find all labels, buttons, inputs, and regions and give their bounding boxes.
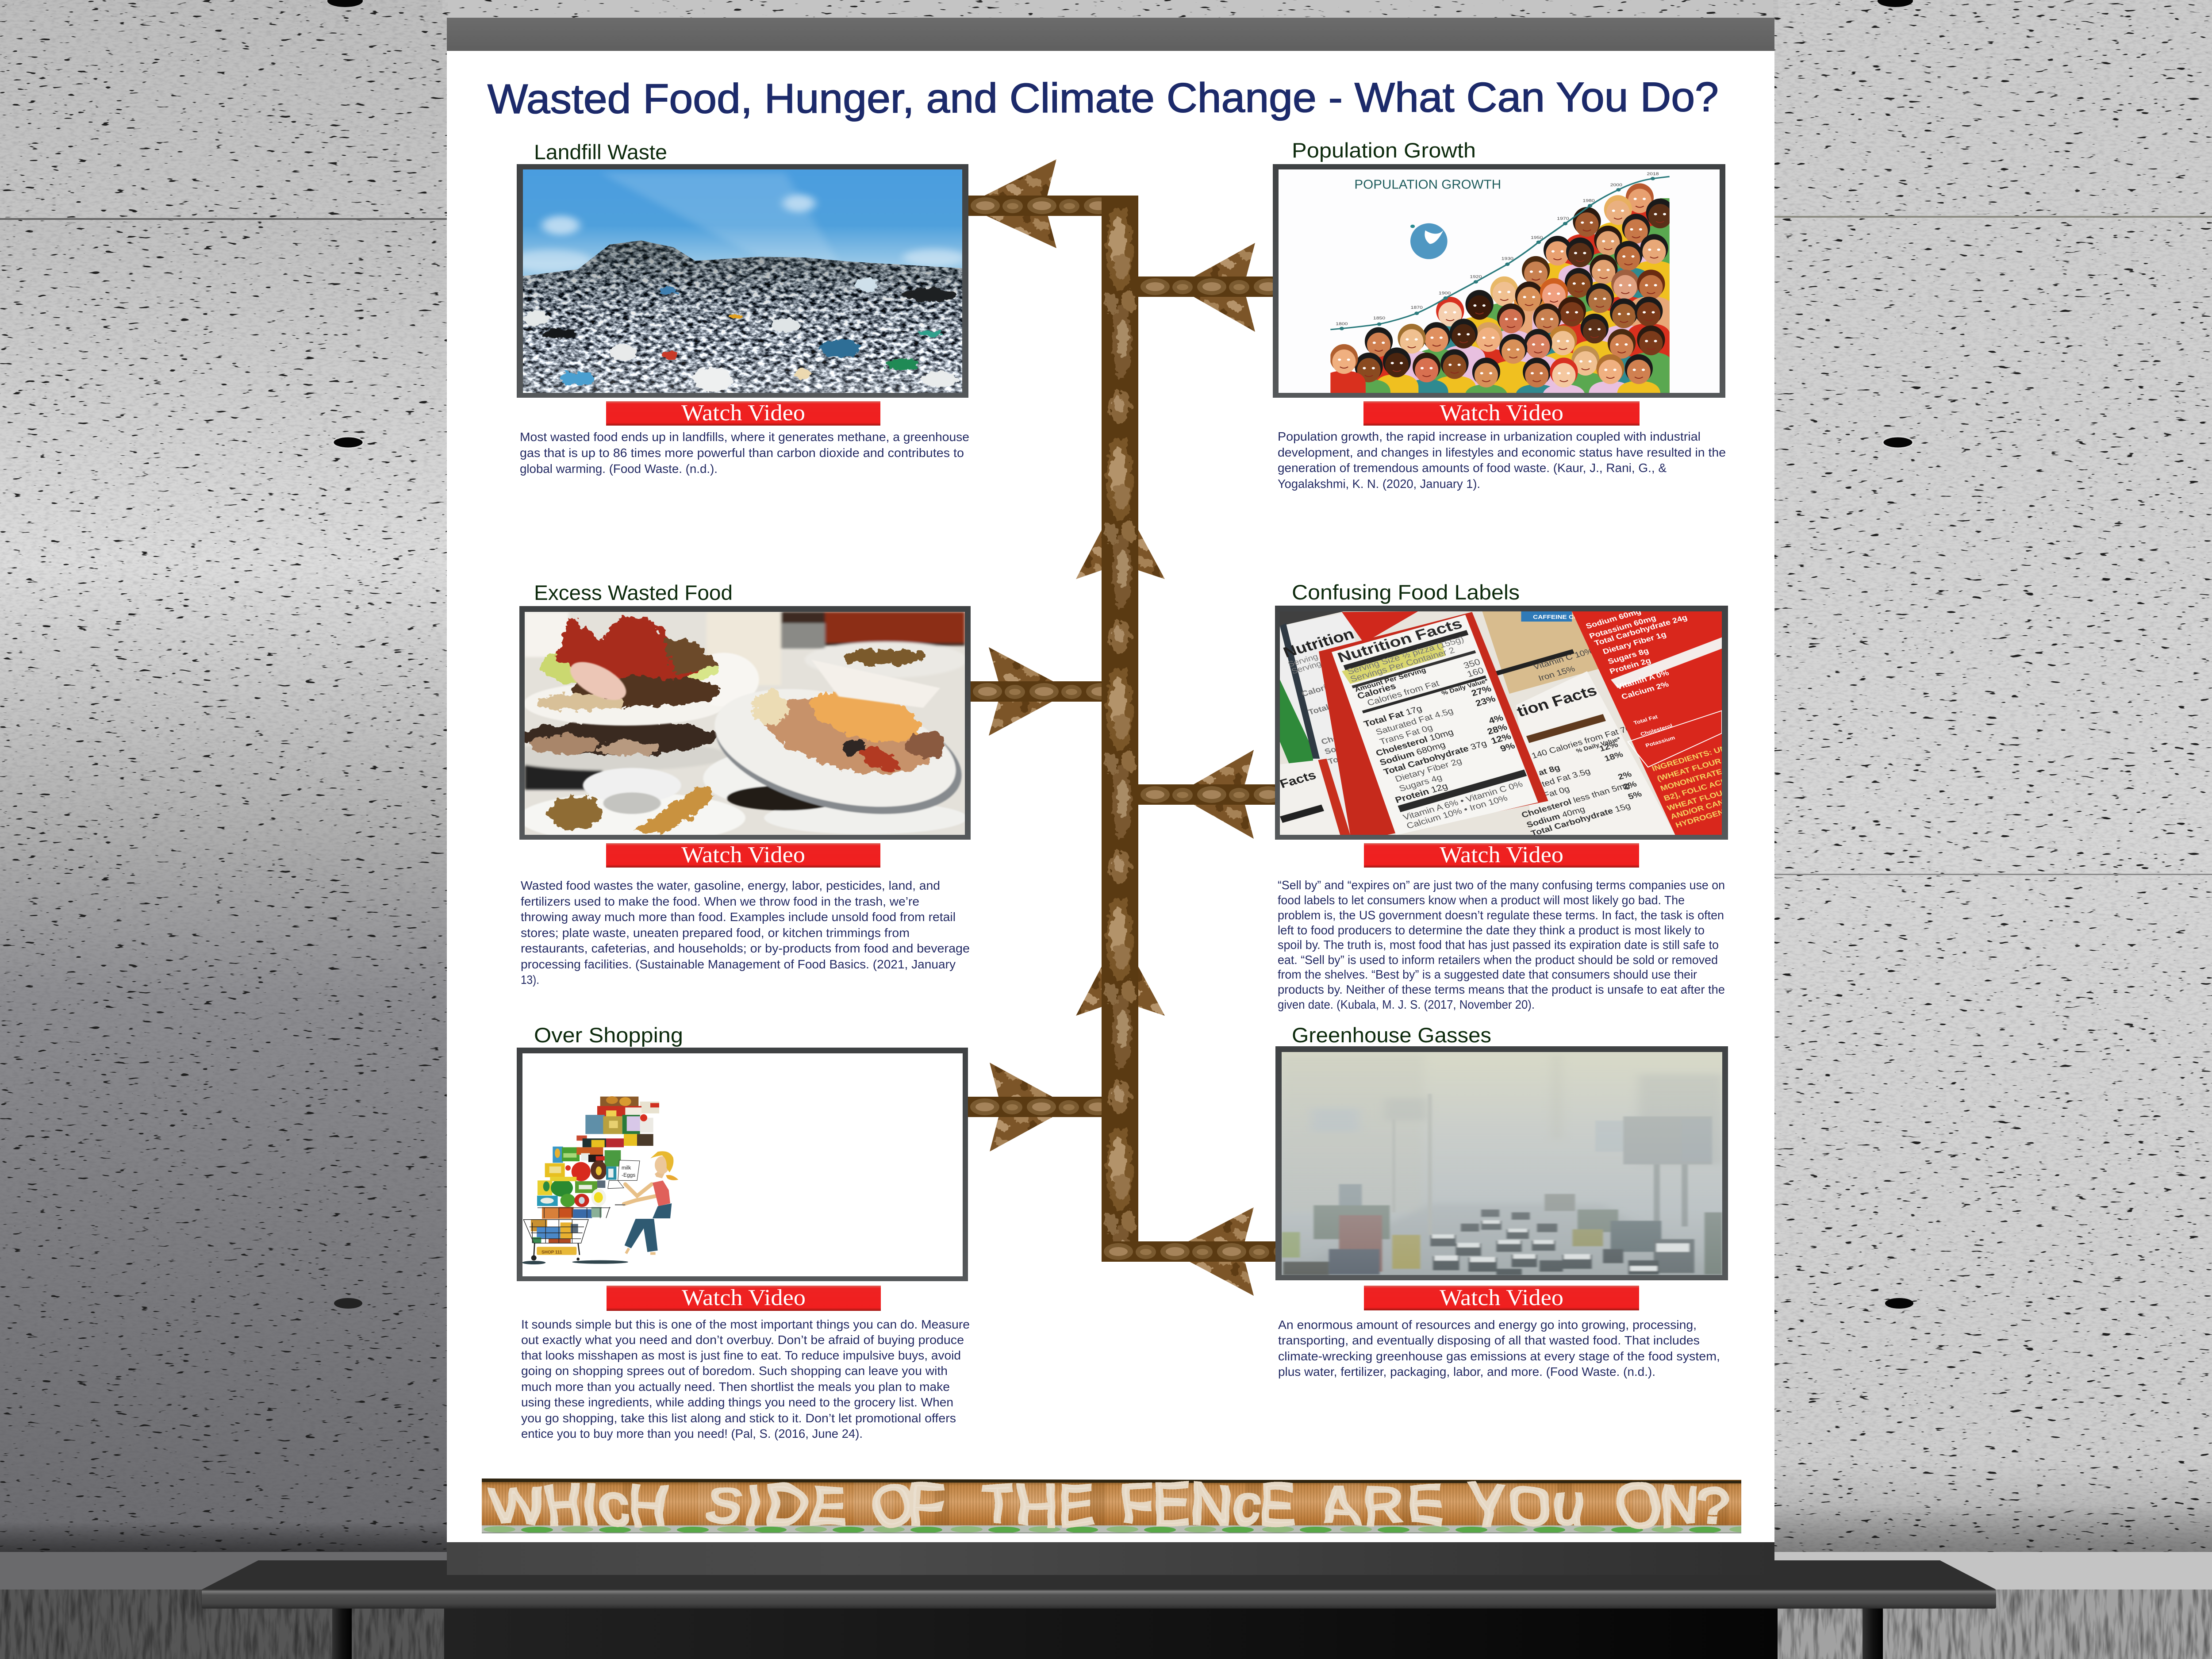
body text: restaurants, cafeterias, and households; or by-products from food and beverage [521, 941, 970, 955]
frame [517, 1048, 968, 1281]
body text: It sounds simple but this is one of the most important things you can do. Measure [521, 1317, 970, 1331]
photo: nutrition facts labels: Dietary Fiber 2g [1394, 757, 1463, 784]
chart: population growth illustration: 1900 [1439, 291, 1451, 296]
photo: nutrition facts labels: MONONITRATE [VITAM [1659, 758, 1754, 793]
slogan text: THE [980, 1475, 1094, 1536]
panel: over shopping [517, 1023, 970, 1440]
body text: given date. (Kubala, M. J. S. (2017, November 20). [1278, 998, 1535, 1011]
body text: Wasted food wastes the water, gasoline, energy, labor, pesticides, land, and [521, 879, 940, 892]
watch video button: Watch Video [1440, 400, 1563, 426]
photo: nutrition facts labels: Trans Fat 0g [1379, 723, 1434, 746]
photo: nutrition facts labels: Protein 2g [1608, 656, 1652, 676]
photo: nutrition facts labels: Cholesterol less than 5mg [1520, 780, 1631, 820]
photo: nutrition facts labels: Sodiu [1323, 741, 1351, 757]
slogan text: FENcE [1120, 1475, 1295, 1536]
photo: nutrition facts labels: Total F [1307, 701, 1338, 717]
photo: nutrition facts labels: % Daily Value* [1441, 678, 1489, 697]
photo: nutrition facts labels: Amount Per Serving [1354, 666, 1427, 694]
photo: nutrition facts labels: 9% [1499, 741, 1517, 754]
photo: nutrition facts labels: Saturated Fat 4.5g [1375, 707, 1455, 737]
photo: nutrition facts labels: 28% [1486, 722, 1509, 737]
body text: generation of tremendous amounts of food waste. (Kaur, J., Rani, G., & [1278, 461, 1667, 475]
body text: gas that is up to 86 times more powerful than carbon dioxide and contributes to [520, 446, 964, 460]
watch video button: Watch Video [681, 400, 805, 426]
photo: nutrition facts labels: Sodium 680mg [1379, 741, 1447, 768]
chart: population growth illustration: 1970 [1557, 216, 1569, 221]
wall bolt holes [327, 0, 1913, 1309]
watch video button [1364, 842, 1639, 868]
title: Wasted Food, Hunger, and Climate Change - What Can You Do? [488, 73, 1719, 122]
chart: population growth illustration: 1930 [1502, 257, 1513, 261]
body text: An enormous amount of resources and energy go into growing, processing, [1278, 1318, 1697, 1332]
heading: Population Growth [1292, 138, 1476, 162]
body text: Yogalakshmi, K. N. (2020, January 1). [1278, 477, 1480, 491]
body text: entice you to buy more than you need! (Pal, S. (2016, June 24). [521, 1427, 863, 1440]
body text [521, 879, 970, 987]
body text: spoil by. The truth is, most food that has just passed its expiration date is still safe to [1278, 938, 1719, 952]
arrow: main trunk [1102, 196, 1138, 1262]
body text: development, and changes in lifestyles and economic status have resulted in the [1278, 445, 1726, 459]
photo: nutrition facts labels: HYDROGENATE [1674, 803, 1741, 829]
photo: nutrition facts labels: Fat 0g [1542, 784, 1571, 800]
body text: fertilizers used to make the food. When we throw food in the trash, we’re [521, 895, 919, 908]
chart: population growth illustration: 2000 [1610, 183, 1622, 188]
watch video button [606, 842, 880, 868]
photo: nutrition facts labels: Calcium 2% [1620, 680, 1670, 701]
panel: landfill waste [510, 140, 969, 476]
chart: population growth illustration: POPULATION GROWTH [1354, 177, 1501, 192]
photo: nutrition facts labels: Vitamin A 6% • Vitamin C 0% [1402, 780, 1524, 822]
photo: nutrition facts labels: Nutrition Facts [1335, 616, 1464, 666]
photo: nutrition facts labels: Calories [1300, 681, 1338, 699]
body text: that looks misshapen as most is just fine to eat. To reduce impulsive buys, avoid [521, 1348, 961, 1362]
photo: nutrition facts labels: Serving Size ½ pizza (155g) [1346, 635, 1465, 676]
watch video button: Watch Video [681, 842, 805, 868]
arrow: upward head 2 [1076, 967, 1165, 1016]
photo: nutrition facts labels: Sugars 4g [1398, 773, 1444, 794]
body text: processing facilities. (Sustainable Management of Food Basics. (2021, January [521, 957, 956, 971]
body text [1278, 878, 1725, 1011]
panel: population growth [1273, 138, 1726, 611]
photo: nutrition facts labels: Total Fat [1633, 714, 1659, 726]
photo: nutrition facts labels: Potassium 60mg [1588, 613, 1657, 640]
photo: nutrition facts labels: tion Facts [1514, 682, 1599, 720]
photo: nutrition facts labels: Cholesterol 10mg [1375, 728, 1455, 758]
photo: nutrition facts labels: 5% [1627, 789, 1643, 802]
body text: global warming. (Food Waste. (n.d.). [520, 462, 718, 476]
photo: nutrition facts labels: Total Fat 17g [1363, 704, 1423, 729]
watch video button: Watch Video [682, 1285, 806, 1310]
photo: nutrition facts labels: 140 Calories from Fat 70 [1530, 724, 1632, 760]
heading: Over Shopping [534, 1023, 683, 1047]
chart: population growth illustration: 1850 [1373, 316, 1385, 321]
body text: transporting, and eventually disposing of all that wasted food. That includes [1278, 1333, 1700, 1347]
chart: population growth illustration [1279, 169, 1720, 611]
photo: plates of leftover food [502, 612, 979, 843]
frame [1275, 606, 1728, 840]
slogan text: WHIcH [491, 1475, 668, 1536]
body text: from the shelves. “Best by” is a suggested date that consumers should use their [1278, 968, 1697, 981]
body text: problem is, the US government doesn’t regulate these terms. In fact, the task is often [1278, 908, 1724, 922]
arrow diagram [964, 159, 1275, 1296]
body text [1278, 1318, 1720, 1379]
photo: smog over traffic [1282, 1052, 1722, 1275]
body text: left to food producers to determine the date they think a product is most likely to [1278, 923, 1705, 937]
photo: nutrition facts labels: Calories [1356, 681, 1398, 701]
heading: Greenhouse Gasses [1292, 1023, 1491, 1047]
photo: nutrition facts labels: 12% [1490, 732, 1513, 746]
chart: population growth illustration: 1950 [1531, 235, 1543, 240]
poster stand foot [444, 1608, 1778, 1659]
body text: products by. Neither of these terms means that the product is unsafe to eat after the [1278, 983, 1725, 996]
photo: nutrition facts labels: INGREDIENTS: UNBLEA [1651, 737, 1750, 773]
poster sheet [447, 44, 1774, 1542]
watch video button [606, 400, 880, 426]
photo: nutrition facts labels: Chole [1320, 732, 1347, 746]
watch video button: Watch Video [1440, 842, 1563, 868]
watch video button: Watch Video [1440, 1285, 1563, 1310]
arrow: from over shopping [968, 1063, 1102, 1152]
photo: landfill pile under blue sky [510, 169, 966, 393]
photo: nutrition facts labels: Nutrition [1281, 625, 1356, 661]
frame [519, 606, 971, 840]
bottom rail [447, 1542, 1774, 1575]
body text: going on shopping sprees out of boredom. Such shopping can leave you with [521, 1364, 948, 1378]
panel: greenhouse gasses [1275, 1023, 1728, 1379]
photo: nutrition facts labels: 350 [1462, 657, 1482, 671]
slogan text: ON? [1619, 1475, 1728, 1536]
body text: you go shopping, take this list along and stick to it. Don’t let promotional offers [521, 1411, 956, 1425]
heading: Landfill Waste [534, 140, 667, 164]
photo: nutrition facts labels: 23% [1474, 694, 1497, 708]
table front edge [202, 1590, 1996, 1609]
slogan text [491, 1475, 1728, 1536]
panel: excess wasted food [502, 581, 979, 987]
photo: nutrition facts labels: (WHEAT FLOUR, NIACIN [1655, 747, 1755, 783]
photo: nutrition facts labels: Total Carbohydrate 24g [1593, 613, 1689, 647]
photo: nutrition facts labels: WHEAT FLOUR), SUG [1666, 780, 1755, 812]
photo: nutrition facts labels: % Daily Value* [1575, 735, 1621, 754]
body text: 13). [521, 973, 539, 987]
frame [1273, 164, 1725, 398]
panel: confusing food labels [1275, 580, 1755, 1011]
heading: Confusing Food Labels [1292, 580, 1520, 604]
body text: Most wasted food ends up in landfills, where it generates methane, a greenhouse [520, 430, 969, 444]
photo: nutrition facts labels: Calories from Fat [1366, 679, 1441, 708]
chart: population growth illustration: 1920 [1470, 275, 1482, 279]
chart: population growth illustration: 1980 [1582, 199, 1595, 203]
photo: nutrition facts labels: Protein 12g [1394, 781, 1449, 805]
top rail [447, 18, 1774, 51]
photo: nutrition facts labels: 4% [1487, 713, 1505, 726]
photo: nutrition facts labels: Sodium 40mg [1525, 805, 1586, 830]
slogan text: OF [873, 1475, 943, 1536]
image area [522, 1053, 963, 1276]
illustration: woman pushing overloaded shopping cart: -Eggs [622, 1172, 635, 1178]
photo: nutrition facts labels: Vitamin C 10% [1532, 646, 1594, 672]
photo: nutrition facts labels: 160 [1466, 666, 1485, 679]
arrow: to landfill waste [964, 159, 1102, 248]
illustration: woman pushing overloaded shopping cart: milk [622, 1164, 631, 1171]
photo: nutrition facts labels: 27% [1470, 684, 1493, 698]
body text: throwing away much more than food. Examples include unsold food from retail [521, 910, 956, 924]
banner: wooden fence slogan [482, 1475, 1741, 1536]
photo: nutrition facts labels: Calcium 10% • Iron 10% [1406, 794, 1509, 831]
photo: nutrition facts labels: Facts [1278, 768, 1318, 791]
photo: nutrition facts labels: Cholesterol [1640, 723, 1674, 737]
body text: climate-wrecking greenhouse gas emissions at every stage of the food system, [1278, 1349, 1720, 1363]
photo: nutrition facts labels: ted Fat 3.5g [1540, 767, 1592, 789]
photo: nutrition facts labels: 2% [1622, 780, 1638, 791]
arrow: from greenhouse gasses [1102, 1207, 1275, 1296]
watch video button [607, 1285, 881, 1311]
table legs [332, 1608, 1883, 1659]
table top [202, 1560, 1996, 1590]
photo: nutrition facts labels: Total Carbohydrate 15g [1530, 801, 1632, 838]
photo: nutrition facts labels: Vitamin A 0% [1615, 668, 1670, 691]
body text: “Sell by” and “expires on” are just two of the many confusing terms companies use on [1278, 878, 1725, 892]
body text: stores; plate waste, uneaten prepared food, or kitchen trimmings from [521, 926, 910, 940]
body text: plus water, fertilizer, packaging, labor, and more. (Food Waste. (n.d.). [1278, 1365, 1655, 1379]
body text: using these ingredients, while adding things you need to the grocery list. When [521, 1395, 953, 1409]
photo: nutrition facts labels: 2% [1617, 770, 1633, 782]
slogan text: ARE [1321, 1475, 1444, 1536]
frame [517, 164, 968, 398]
photo: nutrition facts labels: Sodium 60mg [1585, 607, 1642, 630]
arrow: from confusing food labels [1138, 750, 1275, 839]
photo: nutrition facts labels: Servings Per Container 2 [1349, 646, 1456, 684]
photo: nutrition facts labels: B2], FOLIC ACID), GR [1662, 770, 1751, 803]
body text: eat. “Sell by” is used to inform retailers when the product should be sold or removed [1278, 953, 1718, 967]
illustration: woman pushing overloaded shopping cart: SHOP 111 [541, 1250, 562, 1255]
photo: nutrition facts labels: Serving [1290, 660, 1323, 676]
photo: nutrition facts labels: Potassium [1645, 735, 1676, 749]
watch video button [1364, 1285, 1639, 1310]
arrow: from population growth [1138, 243, 1274, 332]
photo: nutrition facts labels: Iron 15% [1537, 664, 1576, 683]
photo: nutrition facts labels: Sugars 8g [1606, 646, 1650, 666]
body text: out exactly what you need and don’t overbuy. Don’t be afraid of buying produce [521, 1333, 964, 1347]
chart: population growth illustration: 1800 [1336, 322, 1348, 326]
photo: nutrition facts labels: Total [1327, 753, 1350, 766]
photo: nutrition facts labels: at 8g [1537, 763, 1561, 777]
body text: Population growth, the rapid increase in urbanization coupled with industrial [1278, 430, 1701, 443]
body text: much more than you actually need. Then shortlist the meals you plan to make [521, 1380, 950, 1394]
chart: population growth illustration: 2018 [1647, 172, 1659, 177]
photo: nutrition facts labels: Total Carbohydrate 37g [1382, 739, 1488, 777]
arrow: from excess wasted food [971, 647, 1102, 736]
slogan text: YOu [1470, 1475, 1584, 1536]
chart: population growth illustration: 1870 [1411, 306, 1423, 310]
photo: nutrition facts labels: 18% [1603, 750, 1624, 763]
heading: Excess Wasted Food [534, 581, 733, 604]
body text [1278, 430, 1726, 491]
photo: nutrition facts labels: CAFFEINE CONT. [1533, 614, 1589, 620]
slogan text: SIDE [705, 1475, 846, 1536]
photo: nutrition facts labels: 12% [1598, 740, 1619, 753]
poster [447, 18, 1774, 1575]
frame [1275, 1046, 1728, 1280]
body text [521, 1317, 970, 1440]
photo: nutrition facts labels: Serving [1287, 653, 1319, 669]
photo: nutrition facts labels [1278, 607, 1755, 838]
body text [520, 430, 969, 476]
watch video button [1363, 400, 1640, 426]
wall ledge and floor [0, 1552, 2212, 1659]
photo: nutrition facts labels: AND/OR CANOLA [1669, 793, 1743, 821]
photo: nutrition facts labels: Dietary Fiber 1g [1601, 630, 1667, 656]
illustration: woman pushing overloaded shopping cart [522, 1096, 678, 1264]
arrow: upward head 1 [1076, 530, 1165, 579]
body text: food labels to let consumers know when a product will most likely go bad. The [1278, 893, 1685, 907]
